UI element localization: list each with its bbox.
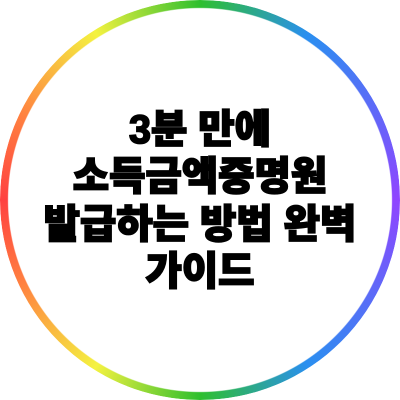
title: 3분 만에 [129, 108, 271, 152]
title: 소득금액증명원 [73, 155, 327, 199]
title: 가이드 [145, 250, 255, 294]
title: 발급하는 방법 완벽 [44, 203, 356, 247]
title [44, 108, 356, 294]
